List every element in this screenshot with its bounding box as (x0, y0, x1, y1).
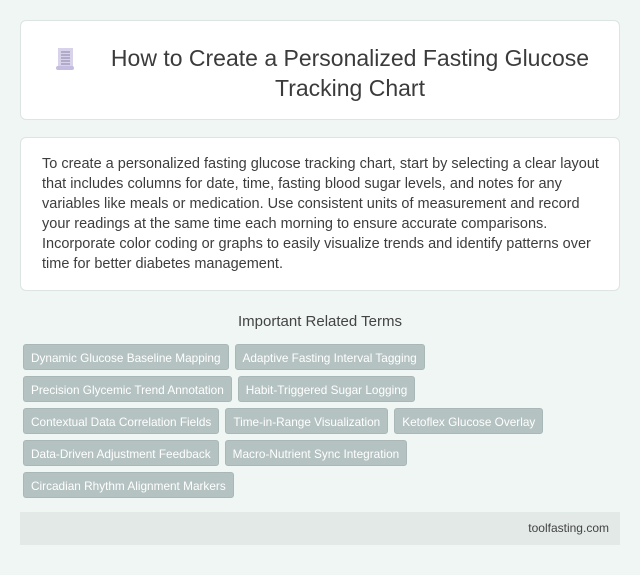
tags: Contextual Data Correlation Fields (31, 415, 211, 429)
header card (20, 20, 620, 120)
description card (20, 137, 620, 291)
footer (20, 512, 620, 545)
tags: Ketoflex Glucose Overlay (402, 415, 535, 429)
tags: Circadian Rhythm Alignment Markers (31, 479, 226, 493)
footer: toolfasting.com (528, 521, 609, 535)
description text: To create a personalized fasting glucose tracking chart, start by selecting a clear layout that includes columns for date, time, fasting blood sugar levels, and notes for any variables like meals or medication. Use consistent units of measurement and record your readings at the same time each morning to ensure accurate comparisons. Incorporate color coding or graphs to easily visualize trends and identify patterns over time for better diabetes management. (42, 156, 599, 272)
icon: document (56, 48, 74, 70)
related terms heading: Important Related Terms (238, 313, 402, 330)
tags: Data-Driven Adjustment Feedback (31, 447, 211, 461)
tags: Dynamic Glucose Baseline Mapping (31, 351, 220, 365)
tags: Time-in-Range Visualization (233, 415, 380, 429)
tags: Habit-Triggered Sugar Logging (246, 383, 407, 397)
title: How to Create a Personalized Fasting Glucose Tracking Chart (111, 45, 589, 101)
tags (23, 344, 543, 498)
tags: Macro-Nutrient Sync Integration (233, 447, 399, 461)
tags: Precision Glycemic Trend Annotation (31, 383, 224, 397)
tags: Adaptive Fasting Interval Tagging (242, 351, 417, 365)
